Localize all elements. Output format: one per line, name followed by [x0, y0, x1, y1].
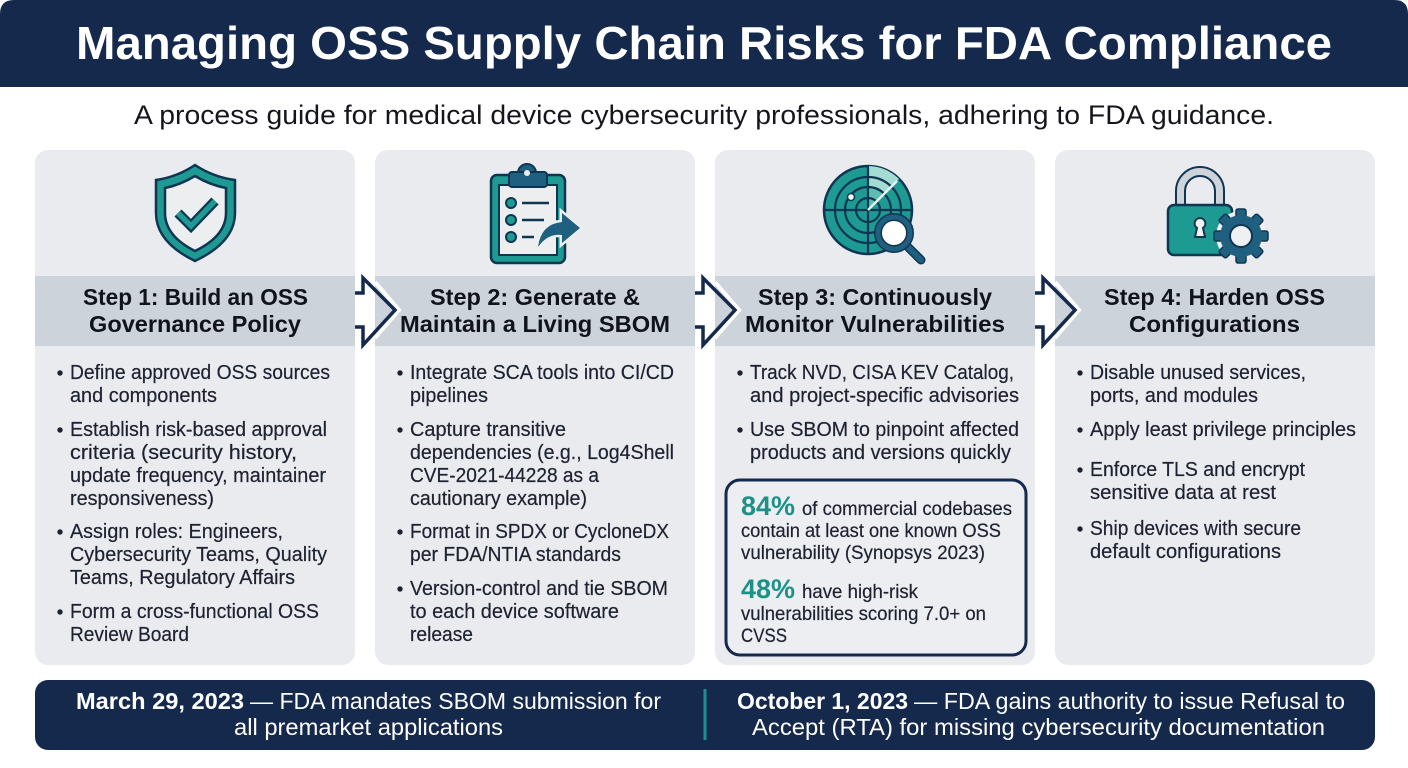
step 2 bullets: release	[410, 624, 473, 646]
callout: statistics: CVSS	[741, 625, 787, 647]
step 4 heading: Step 4: Harden OSS	[1104, 284, 1325, 310]
step 1 heading: Governance Policy	[89, 311, 301, 337]
step 2 heading	[375, 276, 695, 346]
footer: March 2023 mandate: all premarket applications	[234, 714, 503, 740]
step 3 bullets: and project-specific advisories	[750, 385, 1019, 407]
footer: October 2023 authority	[737, 688, 1345, 740]
callout: statistics: 84%	[741, 491, 795, 521]
step 3 bullets: Use SBOM to pinpoint affected	[750, 419, 1019, 441]
arrow: step 2 to step 3	[695, 278, 739, 345]
step 3 bullets	[737, 362, 1019, 464]
step 1 bullets: Establish risk-based approval	[70, 419, 327, 441]
callout: statistics	[726, 480, 1026, 655]
title banner	[0, 0, 1408, 87]
step 2 bullets: per FDA/NTIA standards	[410, 544, 621, 566]
step 3 heading: Monitor Vulnerabilities	[745, 311, 1005, 337]
step 2 bullets: pipelines	[410, 385, 488, 407]
step 3 bullets: Track NVD, CISA KEV Catalog,	[750, 362, 1014, 384]
callout: statistics: vulnerability (Synopsys 2023)	[741, 542, 985, 564]
step 2 bullets: Integrate SCA tools into CI/CD	[410, 362, 674, 384]
icon: shield with check	[156, 165, 235, 261]
step 4 heading: Configurations	[1129, 311, 1300, 337]
footer banner: regulatory dates	[35, 680, 1375, 750]
step 1 bullets: Assign roles: Engineers,	[70, 521, 283, 543]
step 2 bullets: CVE-2021-44228 as a	[410, 465, 600, 487]
step 1 bullets	[57, 362, 330, 646]
step 4 bullets: Ship devices with secure	[1090, 518, 1301, 540]
step 2 heading: Step 2: Generate &	[430, 284, 640, 310]
step 3 heading: Step 3: Continuously	[758, 284, 992, 310]
step 4 bullets: sensitive data at rest	[1090, 482, 1276, 504]
callout: statistics: 48%	[741, 574, 795, 604]
step 4 bullets: Enforce TLS and encrypt	[1090, 459, 1305, 481]
step 1 bullets: Review Board	[70, 624, 189, 646]
arrow: step 3 to step 4	[1035, 278, 1079, 345]
step 4 bullets: Disable unused services,	[1090, 362, 1306, 384]
step 4 bullets: ports, and modules	[1090, 385, 1258, 407]
callout: statistics: of commercial codebases	[802, 498, 1012, 520]
step 1 bullets: update frequency, maintainer	[70, 465, 326, 487]
step 3 bullets: products and versions quickly	[750, 442, 1011, 464]
callout: statistics: have high-risk	[802, 581, 918, 603]
panel: step 3	[715, 150, 1035, 665]
step 1 bullets: criteria (security history,	[70, 442, 297, 464]
step 4 bullets: default configurations	[1090, 541, 1281, 563]
icon: padlock with gear	[1168, 172, 1268, 263]
icon: clipboard with arrow	[491, 164, 580, 263]
footer: October 2023 authority: Accept (RTA) for missing cybersecurity documentation	[752, 714, 1325, 740]
arrow: step 1 to step 2	[355, 278, 399, 345]
step 2 bullets: Capture transitive	[410, 419, 566, 441]
title: Managing OSS Supply Chain Risks for FDA Compliance	[76, 17, 1332, 69]
footer: October 2023 authority: — FDA gains authority to issue Refusal to	[914, 688, 1345, 714]
footer: March 2023 mandate: — FDA mandates SBOM submission for	[250, 688, 661, 714]
panel: step 2	[375, 150, 695, 665]
step 4 bullets: Apply least privilege principles	[1090, 419, 1356, 441]
step 2 bullets: Format in SPDX or CycloneDX	[410, 521, 669, 543]
step 1 bullets: responsiveness)	[70, 488, 214, 510]
step 2 bullets: dependencies (e.g., Log4Shell	[410, 442, 674, 464]
panel: step 4	[1055, 150, 1375, 665]
callout: statistics: vulnerabilities scoring 7.0+ on	[741, 603, 986, 625]
step 1 heading	[35, 276, 355, 346]
step 1 bullets: and components	[70, 385, 217, 407]
step 4 heading	[1055, 276, 1375, 346]
step 1 bullets: Teams, Regulatory Affairs	[70, 567, 295, 589]
step 2 heading: Maintain a Living SBOM	[400, 311, 670, 337]
footer: March 2023 mandate: March 29, 2023	[76, 688, 244, 714]
step 1 bullets: Form a cross-functional OSS	[70, 601, 319, 623]
callout: statistics: contain at least one known OSS	[741, 520, 1001, 542]
step 3 heading	[715, 276, 1035, 346]
panel: step 1	[35, 150, 355, 665]
step 2 bullets: cautionary example)	[410, 488, 587, 510]
subtitle: A process guide for medical device cybersecurity professionals, adhering to FDA guidance.	[134, 100, 1274, 130]
step 4 bullets	[1077, 362, 1356, 563]
step 2 bullets: Version-control and tie SBOM	[410, 578, 668, 600]
icon: radar with magnifier	[824, 166, 921, 260]
step 1 heading: Step 1: Build an OSS	[83, 284, 308, 310]
footer: March 2023 mandate	[76, 688, 661, 740]
step 2 bullets	[397, 362, 674, 646]
step 1 bullets: Define approved OSS sources	[70, 362, 330, 384]
step 1 bullets: Cybersecurity Teams, Quality	[70, 544, 327, 566]
step 2 bullets: to each device software	[410, 601, 619, 623]
footer: October 2023 authority: October 1, 2023	[737, 688, 908, 714]
